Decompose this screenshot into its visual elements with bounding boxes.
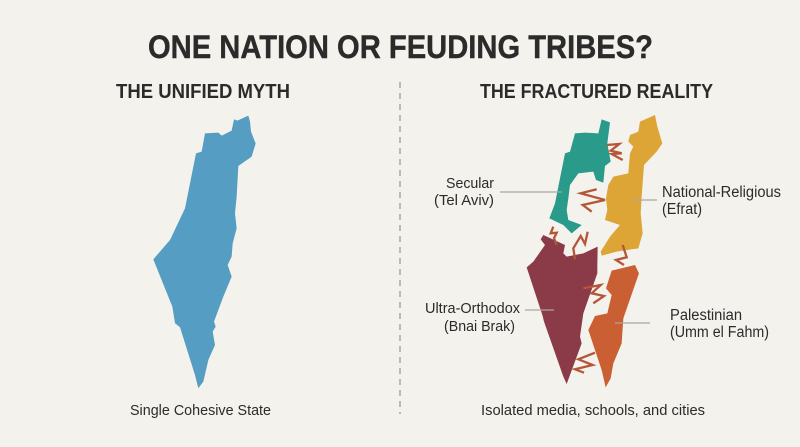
label: efrat: (Efrat) bbox=[662, 201, 702, 218]
map: unified blue bbox=[153, 116, 256, 388]
label: bnai brak: (Bnai Brak) bbox=[444, 318, 515, 335]
heading: the unified myth: THE UNIFIED MYTH bbox=[116, 80, 290, 103]
conflict zigzags bbox=[551, 144, 627, 373]
leader lines bbox=[500, 192, 657, 323]
caption: single cohesive state: Single Cohesive State bbox=[130, 402, 271, 419]
label: umm el fahm: (Umm el Fahm) bbox=[670, 324, 769, 341]
region: ultra-orthodox maroon bbox=[527, 235, 598, 384]
region: palestinian orange bbox=[588, 265, 639, 387]
label: national-religious: National-Religious bbox=[662, 184, 781, 201]
region: secular teal bbox=[549, 119, 611, 233]
map: fractured regions bbox=[527, 115, 662, 387]
label: secular: Secular bbox=[446, 175, 494, 192]
label: ultra-orthodox: Ultra-Orthodox bbox=[425, 300, 520, 317]
label: tel aviv: (Tel Aviv) bbox=[434, 192, 494, 209]
title: ONE NATION OR FEUDING TRIBES? bbox=[148, 29, 653, 65]
heading: the fractured reality: THE FRACTURED REALITY bbox=[480, 80, 713, 103]
label: palestinian: Palestinian bbox=[670, 307, 742, 324]
region: national-religious gold bbox=[601, 115, 662, 256]
caption: isolated media: Isolated media, schools, and cities bbox=[481, 402, 705, 419]
